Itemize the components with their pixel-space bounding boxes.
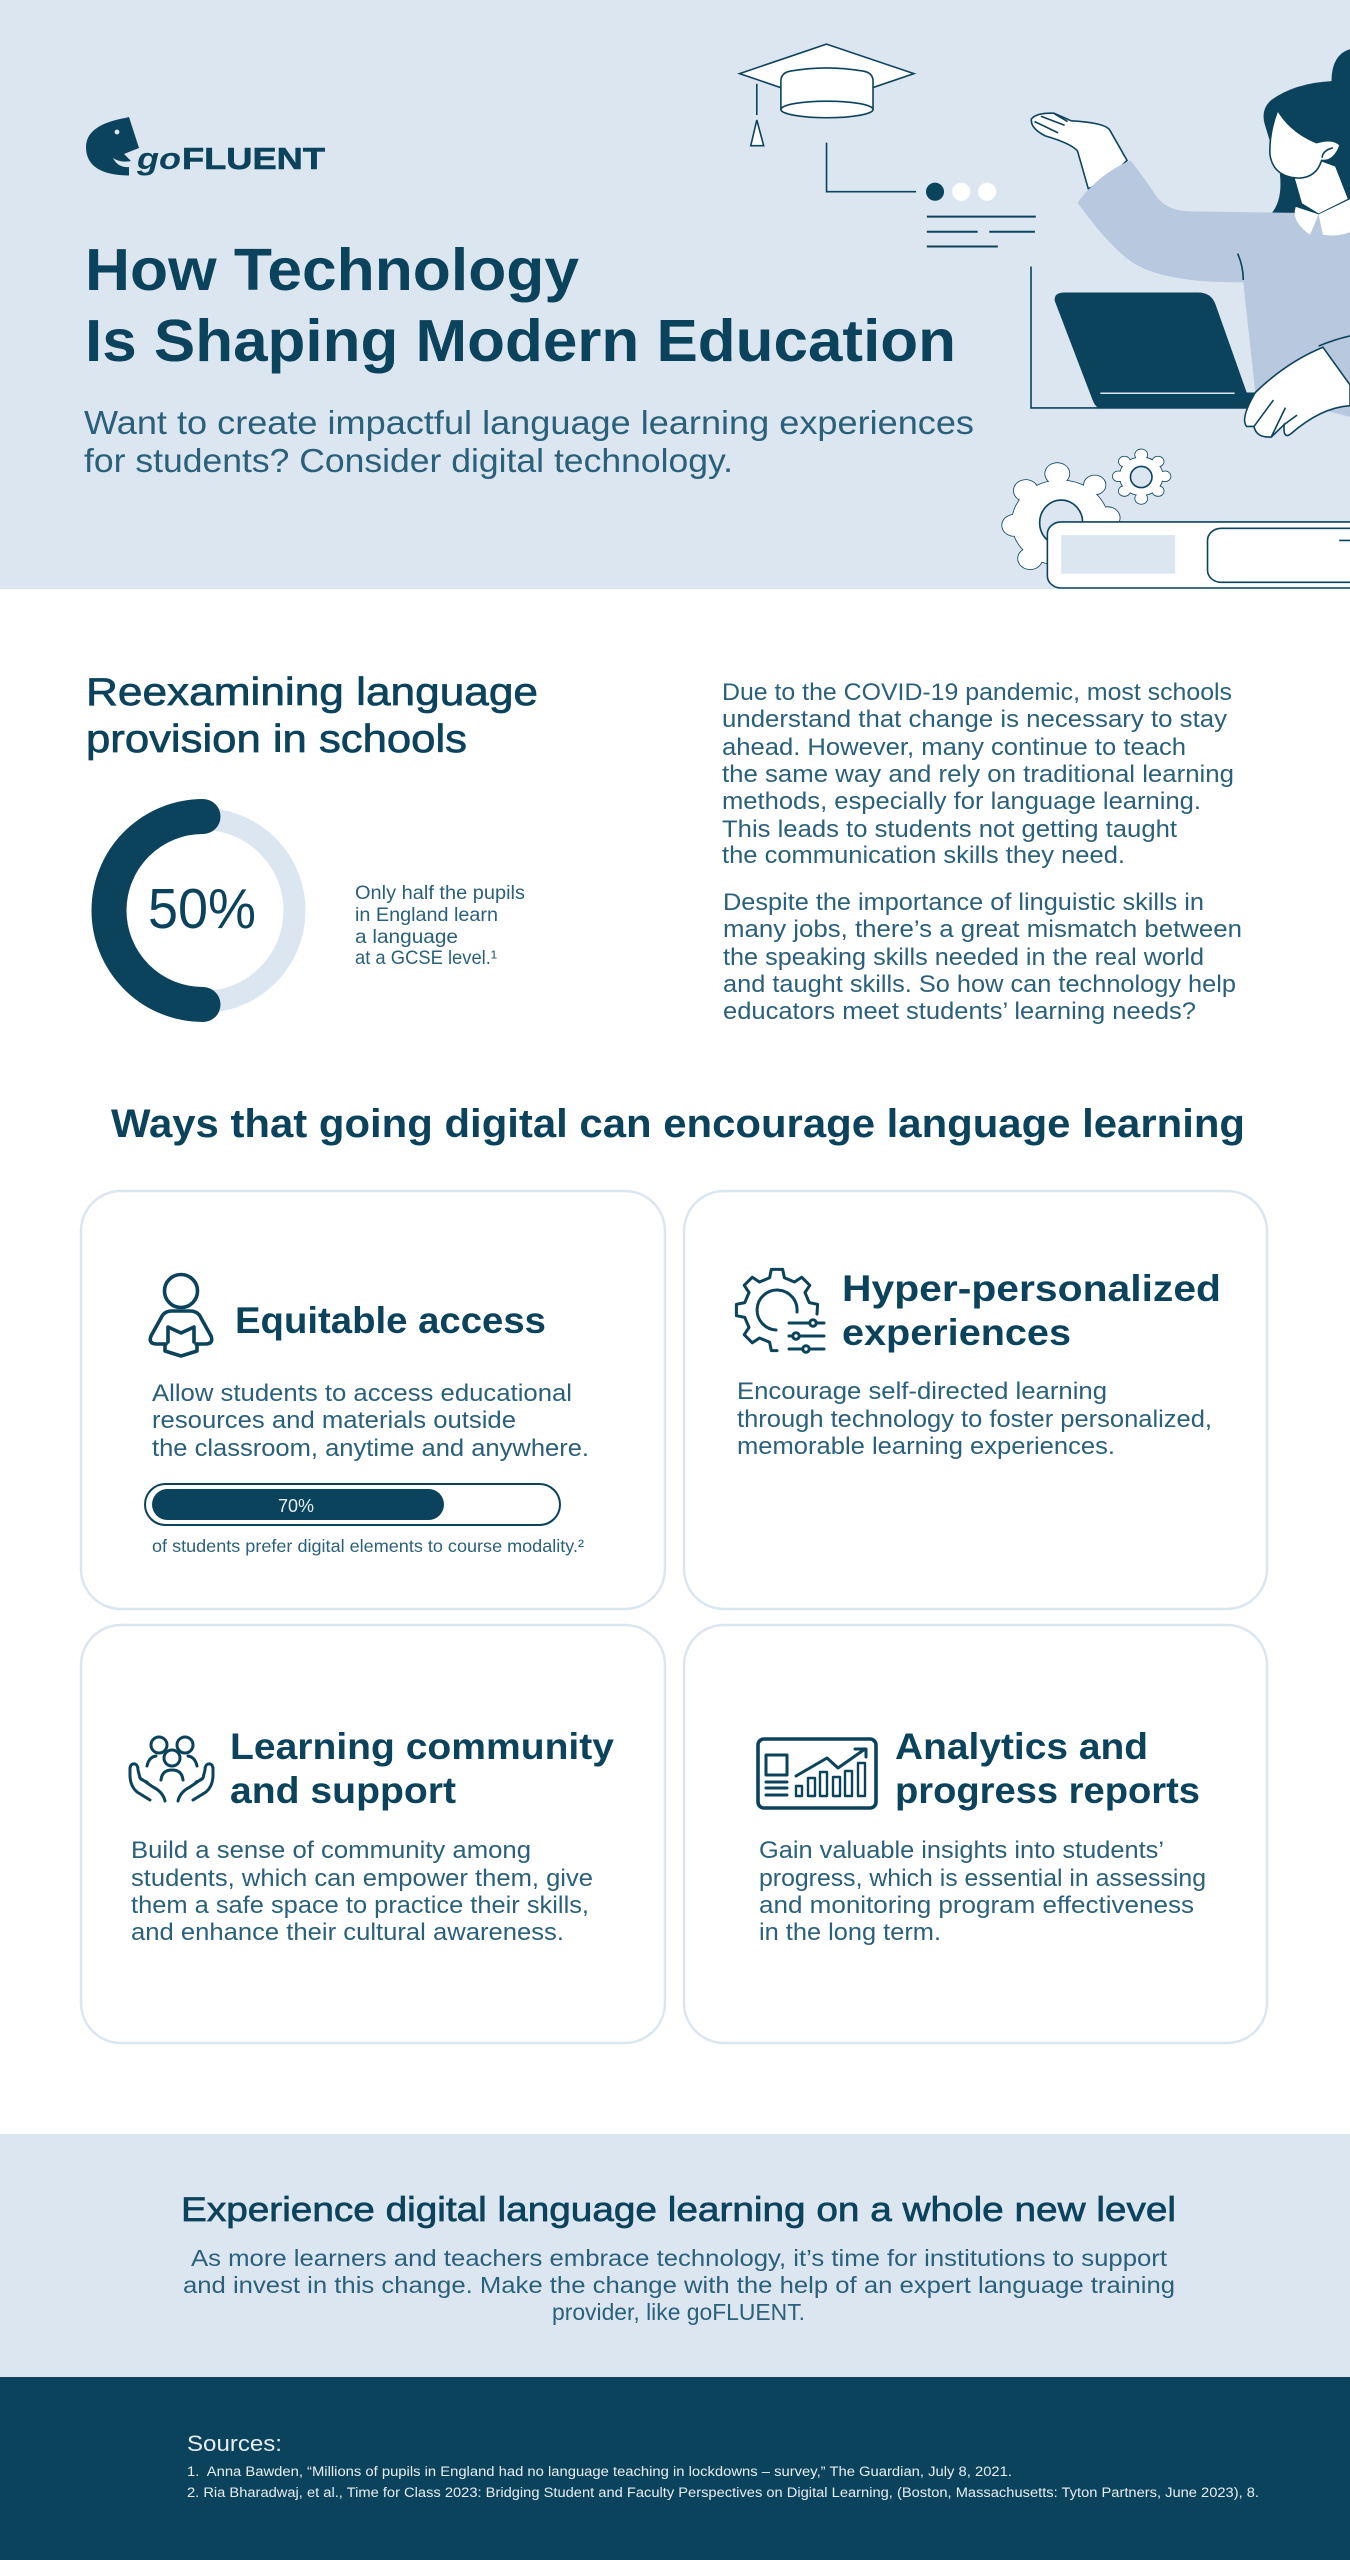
source list: 2. Ria Bharadwaj, et al., Time for Class 2023: Bridging Student and Faculty Perspectives on Digital Learning, (Boston, Massachusetts: Tyton Partners, June 2023), 8.	[187, 2485, 1259, 2500]
paragraph: covid context: methods, especially for language learning.	[722, 788, 1201, 815]
raised hand	[1031, 113, 1127, 189]
stat caption: of students prefer digital elements to course modality.²	[152, 1536, 584, 1556]
control panel	[1047, 522, 1350, 588]
card: analytics	[684, 1625, 1267, 2043]
paragraph: covid context: ahead. However, many continue to teach	[722, 734, 1186, 761]
card text: them a safe space to practice their skills,	[131, 1892, 589, 1919]
paragraph: skills mismatch: educators meet students’ learning needs?	[723, 998, 1196, 1025]
card: equitable access	[81, 1191, 665, 1609]
torso and sleeve	[1078, 160, 1350, 417]
lower hand	[1245, 336, 1350, 437]
donut chart: 50%: 50%	[148, 877, 256, 941]
card title: Analytics and	[895, 1726, 1148, 1767]
title	[85, 237, 956, 374]
card: learning community	[81, 1625, 665, 2043]
donut chart: 50%	[109, 816, 294, 1004]
frame line	[1031, 266, 1101, 408]
illustration: teacher with laptop, cap and gears	[740, 44, 1350, 588]
heading: reexamining: Reexamining language	[86, 671, 538, 714]
panel: call to action	[0, 2134, 1350, 2377]
paragraph: skills mismatch: and taught skills. So how can technology help	[723, 971, 1236, 998]
card text: resources and materials outside	[152, 1407, 516, 1434]
card title: Equitable access	[235, 1300, 546, 1341]
text placeholder lines	[927, 217, 1036, 246]
panel: header	[0, 0, 1350, 589]
paragraph: covid context: This leads to students not getting taught	[722, 816, 1177, 843]
card title: progress reports	[895, 1770, 1200, 1811]
card title	[842, 1268, 1221, 1353]
card text: and monitoring program effectiveness	[759, 1892, 1194, 1919]
title: How Technology	[85, 237, 579, 303]
sources heading: Sources:	[187, 2431, 282, 2456]
logo: goFLUENT	[86, 117, 325, 176]
neck	[1293, 160, 1349, 214]
subtitle: for students? Consider digital technology.	[84, 442, 733, 479]
collar	[1295, 199, 1350, 235]
cta heading: Experience digital language learning on a whole new level	[181, 2191, 1176, 2229]
cta text: provider, like goFLUENT.	[552, 2299, 805, 2325]
card text: Encourage self-directed learning	[737, 1378, 1107, 1405]
progress bar: 70%: 70%	[278, 1496, 314, 1516]
stat caption	[355, 882, 525, 969]
cta text	[183, 2245, 1175, 2325]
title: Is Shaping Modern Education	[85, 308, 956, 374]
logo: goFLUENT: FLUENT	[182, 141, 325, 176]
card text	[152, 1380, 589, 1462]
heading: reexamining	[86, 671, 538, 761]
connector line	[827, 143, 916, 192]
icon: small gear	[1113, 449, 1171, 504]
card text: memorable learning experiences.	[737, 1433, 1115, 1460]
paragraph: covid context: understand that change is necessary to stay	[722, 706, 1227, 733]
card text: Build a sense of community among	[131, 1837, 531, 1864]
card title	[895, 1726, 1200, 1811]
icon: gear with sliders	[736, 1269, 824, 1352]
cta text: and invest in this change. Make the change with the help of an expert language training	[183, 2272, 1175, 2298]
card text: and enhance their cultural awareness.	[131, 1919, 564, 1946]
progress bar: 70%	[145, 1484, 560, 1525]
stat caption: in England learn	[355, 904, 498, 926]
icon: graduation cap	[740, 44, 914, 146]
laptop	[1055, 292, 1257, 409]
heading: reexamining: provision in schools	[86, 718, 467, 761]
paragraph: covid context: Due to the COVID-19 pandemic, most schools	[722, 679, 1232, 706]
card title: experiences	[842, 1312, 1071, 1353]
card title	[230, 1726, 614, 1811]
card text	[131, 1837, 593, 1946]
cta text: As more learners and teachers embrace technology, it’s time for institutions to support	[191, 2245, 1168, 2271]
card text: students, which can empower them, give	[131, 1865, 593, 1892]
stat caption: Only half the pupils	[355, 882, 525, 904]
icon: analytics dashboard	[758, 1739, 876, 1808]
paragraph: covid context: the communication skills they need.	[722, 842, 1125, 869]
card text: Gain valuable insights into students’	[759, 1837, 1164, 1864]
card title: Hyper-personalized	[842, 1268, 1221, 1309]
paragraph: skills mismatch	[723, 889, 1242, 1025]
card text: in the long term.	[759, 1919, 941, 1946]
paragraph: skills mismatch: the speaking skills needed in the real world	[723, 944, 1204, 971]
stat caption: at a GCSE level.¹	[355, 947, 497, 969]
subtitle: Want to create impactful language learning experiences	[84, 404, 974, 441]
card title: and support	[230, 1770, 456, 1811]
panel: reexamining language provision	[86, 671, 1242, 1025]
logo: goFLUENT: go	[136, 141, 181, 176]
stat caption: a language	[355, 926, 458, 948]
panel: sources footer	[0, 2377, 1350, 2560]
card text: the classroom, anytime and anywhere.	[152, 1435, 589, 1462]
subtitle	[84, 404, 974, 479]
source list: 1. Anna Bawden, “Millions of pupils in England had no language teaching in lockdowns – survey,” The Guardian, July 8, 2021.	[187, 2464, 1012, 2479]
paragraph: covid context	[722, 679, 1234, 869]
card text: progress, which is essential in assessing	[759, 1865, 1206, 1892]
card text: Allow students to access educational	[152, 1380, 572, 1407]
card title: Learning community	[230, 1726, 614, 1767]
heading: ways: Ways that going digital can encourage language learning	[111, 1102, 1245, 1146]
card text	[759, 1837, 1206, 1946]
paragraph: skills mismatch: many jobs, there’s a great mismatch between	[723, 916, 1242, 943]
woman	[1031, 49, 1350, 437]
paragraph: skills mismatch: Despite the importance of linguistic skills in	[723, 889, 1204, 916]
icon: large gear	[1002, 463, 1120, 569]
icon: people in hands	[130, 1737, 213, 1801]
card text	[737, 1378, 1212, 1460]
pagination dots	[926, 183, 996, 201]
paragraph: covid context: the same way and rely on traditional learning	[722, 761, 1234, 788]
icon: student reading	[150, 1274, 212, 1356]
card: hyper-personalized	[684, 1191, 1267, 1609]
hair	[1264, 49, 1350, 214]
source list	[187, 2464, 1259, 2500]
card text: through technology to foster personalized,	[737, 1406, 1212, 1433]
face	[1270, 110, 1340, 178]
